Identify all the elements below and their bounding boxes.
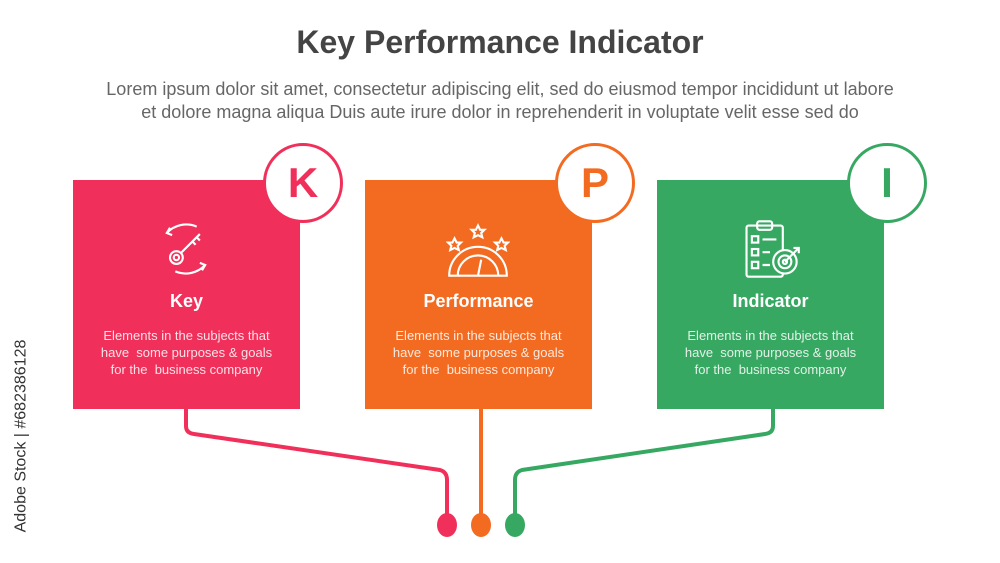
- dot: indicator: [505, 513, 525, 537]
- icon: key: [165, 223, 207, 275]
- circle badge: K: K: [288, 159, 318, 206]
- connector: key: [186, 409, 447, 525]
- panel: performance: for the business company: [403, 362, 554, 377]
- dot: key: [437, 513, 457, 537]
- subtitle text: [106, 79, 894, 122]
- panel: key: for the business company: [111, 362, 262, 377]
- connector: indicator: [515, 409, 773, 525]
- icon: gauge with stars: [446, 223, 510, 277]
- panel: performance: Performance: [423, 291, 534, 311]
- panel: key: Key: [170, 291, 203, 311]
- circle badge: P: [555, 143, 635, 223]
- panel: key: have some purposes & goals: [101, 345, 272, 360]
- panel: performance: Elements in the subjects that: [395, 328, 562, 343]
- icon: clipboard target: [745, 220, 800, 278]
- circle badge: I: [847, 143, 927, 223]
- circle badge: K: [263, 143, 343, 223]
- panel: key: Elements in the subjects that: [103, 328, 270, 343]
- subtitle text: Lorem ipsum dolor sit amet, consectetur adipiscing elit, sed do eiusmod tempor incididunt ut labore: [106, 79, 894, 99]
- side watermark text: Adobe Stock | #682386128: [12, 340, 30, 532]
- circle badge: P: P: [581, 159, 609, 206]
- panel: key: [73, 180, 300, 409]
- panel: performance: [365, 180, 592, 409]
- connector: performance: [479, 409, 483, 525]
- dot: performance: [471, 513, 491, 537]
- panel: indicator: Indicator: [732, 291, 808, 311]
- circle badge: I: I: [881, 159, 893, 206]
- panel: indicator: Elements in the subjects that: [687, 328, 854, 343]
- panel: indicator: [657, 180, 884, 409]
- panel: indicator: for the business company: [695, 362, 846, 377]
- subtitle text: et dolore magna aliqua Duis aute irure dolor in reprehenderit in voluptate velit esse sed do: [141, 102, 859, 122]
- panel: performance: have some purposes & goals: [393, 345, 564, 360]
- title: Key Performance Indicator: [296, 24, 704, 60]
- panel: indicator: have some purposes & goals: [685, 345, 856, 360]
